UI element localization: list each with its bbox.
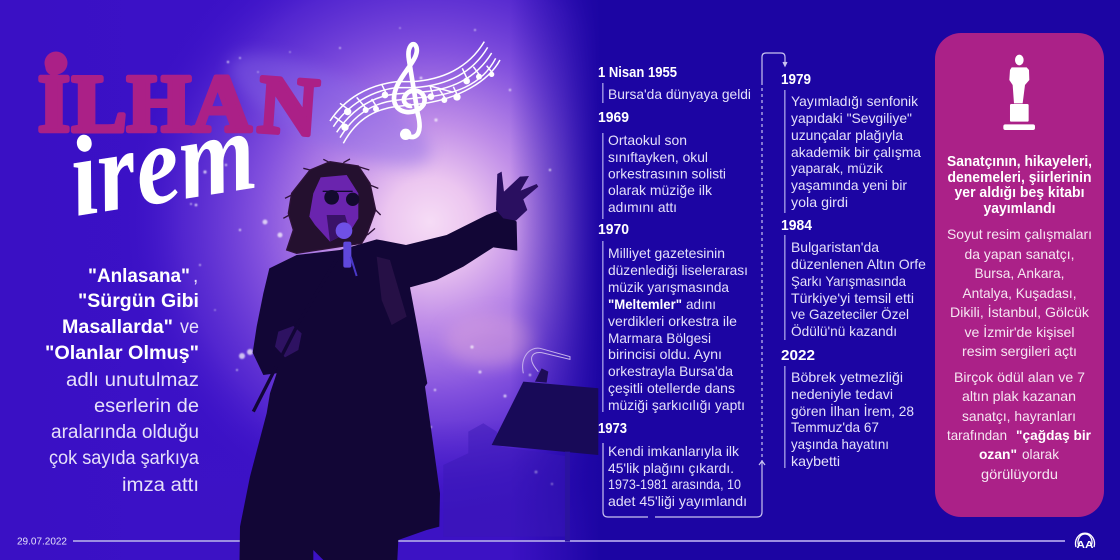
music stand — [492, 348, 598, 542]
entry 1970 — [598, 222, 748, 413]
entry 1984: Ödülü'nü kazandı — [791, 322, 897, 339]
panel text: awards: Birçok ödül alan ve 7 — [954, 369, 1085, 385]
entry 1979: yaparak, müzik — [791, 160, 884, 176]
entry 1969 — [598, 110, 726, 219]
footer rule — [73, 540, 1065, 542]
entry 1970: 1970 — [598, 222, 629, 238]
entry 1970: Marmara Bölgesi — [608, 330, 711, 346]
quote text block: aralarında olduğu — [51, 422, 199, 443]
entry 2022: Böbrek yetmezliği — [791, 369, 903, 385]
quote text block: çok sayıda şarkıya — [49, 448, 199, 469]
entry 1984 — [781, 218, 926, 340]
entry 2022: 2022 — [781, 348, 815, 364]
entry 1970: düzenlediği liselerarası — [608, 262, 748, 278]
entry 1970: çeşitli otellerde dans — [608, 380, 735, 396]
entry 1955: Bursa'da dünyaya geldi — [608, 86, 751, 102]
figure: singer on stage — [239, 159, 598, 560]
entry 1973: Kendi imkanlarıyla ilk — [608, 443, 740, 459]
entry 1973 — [598, 421, 747, 509]
entry 1973: 1973 — [598, 421, 627, 437]
entry 1984: ve Gazeteciler Özel — [791, 305, 909, 322]
panel text: paintings: Bursa, Ankara, — [974, 265, 1064, 281]
logo: AA: AA — [1076, 539, 1094, 551]
entry 1970: müzik yarışmasında — [608, 279, 729, 295]
entry 1979 — [781, 72, 921, 213]
entry 1979: yapıdaki "Sevgiliye" — [791, 110, 912, 126]
timeline column 1 — [598, 65, 751, 509]
panel text: awards: sanatçı, hayranları — [962, 408, 1076, 424]
entry 2022: gören İlhan İrem, 28 — [791, 402, 914, 419]
entry 1979: yaşamında yeni bir — [791, 177, 907, 193]
coat — [239, 210, 517, 560]
quote text block: eserlerin de — [94, 396, 199, 417]
panel text: paintings: resim sergileri açtı — [962, 343, 1077, 359]
entry 1984: düzenlenen Altın Orfe — [791, 256, 926, 272]
panel text: awards: ozan" — [979, 446, 1017, 462]
panel text: paintings: Soyut resim çalışmaları — [947, 226, 1092, 242]
title: İLHAN — [38, 58, 321, 153]
entry 1955: 1 Nisan 1955 — [598, 65, 677, 81]
panel heading — [947, 154, 1092, 217]
sunglasses — [323, 190, 359, 206]
panel text: paintings — [947, 226, 1092, 359]
panel heading: denemeleri, şiirlerinin — [948, 170, 1092, 186]
entry 1984: Şarkı Yarışmasında — [791, 273, 906, 289]
treble clef — [394, 44, 425, 137]
panel text: awards: olarak — [1022, 446, 1060, 462]
entry 1969: adımını attı — [608, 199, 677, 215]
entry 1973: adet 45'liği yayımlandı — [608, 493, 747, 509]
timeline connector arrow — [603, 53, 787, 517]
entry 1979: uzunçalar plağıyla — [791, 127, 903, 143]
entry 2022: Temmuz'da 67 — [791, 419, 879, 435]
entry 1984: Türkiye'yi temsil etti — [791, 290, 914, 306]
entry 1970: "Meltemler" — [608, 296, 682, 312]
quote text block — [45, 266, 199, 496]
panel heading: Sanatçının, hikayeleri, — [947, 154, 1092, 170]
face — [309, 175, 358, 242]
quote text block: imza attı — [122, 475, 199, 496]
hair — [283, 159, 381, 253]
panel: purple achievements card — [935, 33, 1104, 517]
entry 1969: 1969 — [598, 110, 629, 126]
entry 2022: yaşında hayatını — [791, 436, 889, 452]
logo: AA — [1076, 533, 1094, 551]
panel text: paintings: Antalya, Kuşadası, — [962, 285, 1076, 301]
hand holding cable — [275, 326, 302, 357]
quote text block: "Sürgün Gibi — [78, 291, 199, 312]
entry 1955 — [598, 65, 751, 103]
entry 1970: verdikleri orkestra ile — [608, 313, 737, 329]
entry 1979: yola girdi — [791, 194, 848, 210]
entry 1970: adını — [686, 296, 716, 312]
entry 1970: müziği şarkıcılığı yaptı — [608, 397, 745, 413]
panel text: paintings: Dikili, İstanbul, Gölcük — [950, 303, 1090, 320]
quote text block: adlı unutulmaz — [66, 370, 199, 391]
entry 1970: orkestrayla Bursa'da — [608, 363, 733, 379]
icon: statuette trophy — [1003, 55, 1035, 130]
entry 1973: 1973-1981 arasında, 10 — [608, 476, 741, 492]
quote text block: "Olanlar Olmuş" — [45, 343, 199, 364]
date: 29.07.2022 — [17, 536, 67, 548]
entry 1984: Bulgaristan'da — [791, 239, 879, 255]
raised hand — [496, 172, 538, 221]
cable and stick — [253, 257, 338, 412]
timeline column 2 — [781, 72, 926, 469]
panel text: awards: altın plak kazanan — [962, 388, 1076, 404]
entry 2022: nedeniyle tedavi — [791, 386, 893, 402]
panel text: awards: görülüyordu — [981, 466, 1058, 482]
icon: music staff and treble clef — [330, 42, 500, 143]
panel text: awards: "çağdaş bir — [1016, 427, 1092, 443]
panel text: awards — [947, 369, 1092, 482]
coat lapel highlight — [377, 257, 407, 325]
quote text block: ve — [180, 317, 199, 338]
entry 1979: akademik bir çalışma — [791, 144, 921, 160]
title — [38, 52, 321, 241]
entry 1969: sınıftayken, okul — [608, 149, 708, 165]
entry 1969: Ortaokul son — [608, 132, 687, 148]
background musician shadow — [443, 423, 570, 537]
quote text block: , — [193, 266, 198, 287]
entry 1969: olarak müziğe ilk — [608, 182, 713, 198]
entry 1970: birincisi oldu. Aynı — [608, 346, 722, 362]
entry 1979: 1979 — [781, 72, 811, 88]
entry 2022 — [781, 348, 914, 469]
panel text: awards: tarafından — [947, 427, 1007, 443]
entry 1984: 1984 — [781, 218, 812, 234]
entry 1969: orkestrasının solisti — [608, 166, 726, 182]
panel text: paintings: ve İzmir'de kişisel — [964, 323, 1074, 340]
entry 1979: Yayımladığı senfonik — [791, 93, 919, 109]
panel heading: yer aldığı beş kitabı — [954, 185, 1084, 201]
panel heading: yayımlandı — [984, 201, 1056, 217]
microphone — [336, 222, 357, 276]
quote text block: "Anlasana" — [88, 266, 190, 287]
title: irem — [60, 86, 264, 241]
entry 1970: Milliyet gazetesinin — [608, 245, 725, 261]
panel text: paintings: da yapan sanatçı, — [964, 246, 1074, 262]
entry 2022: kaybetti — [791, 453, 840, 469]
quote text block: Masallarda" — [62, 317, 173, 338]
background photo: galaxy — [0, 0, 594, 560]
entry 1973: 45'lik plağını çıkardı. — [608, 460, 734, 476]
